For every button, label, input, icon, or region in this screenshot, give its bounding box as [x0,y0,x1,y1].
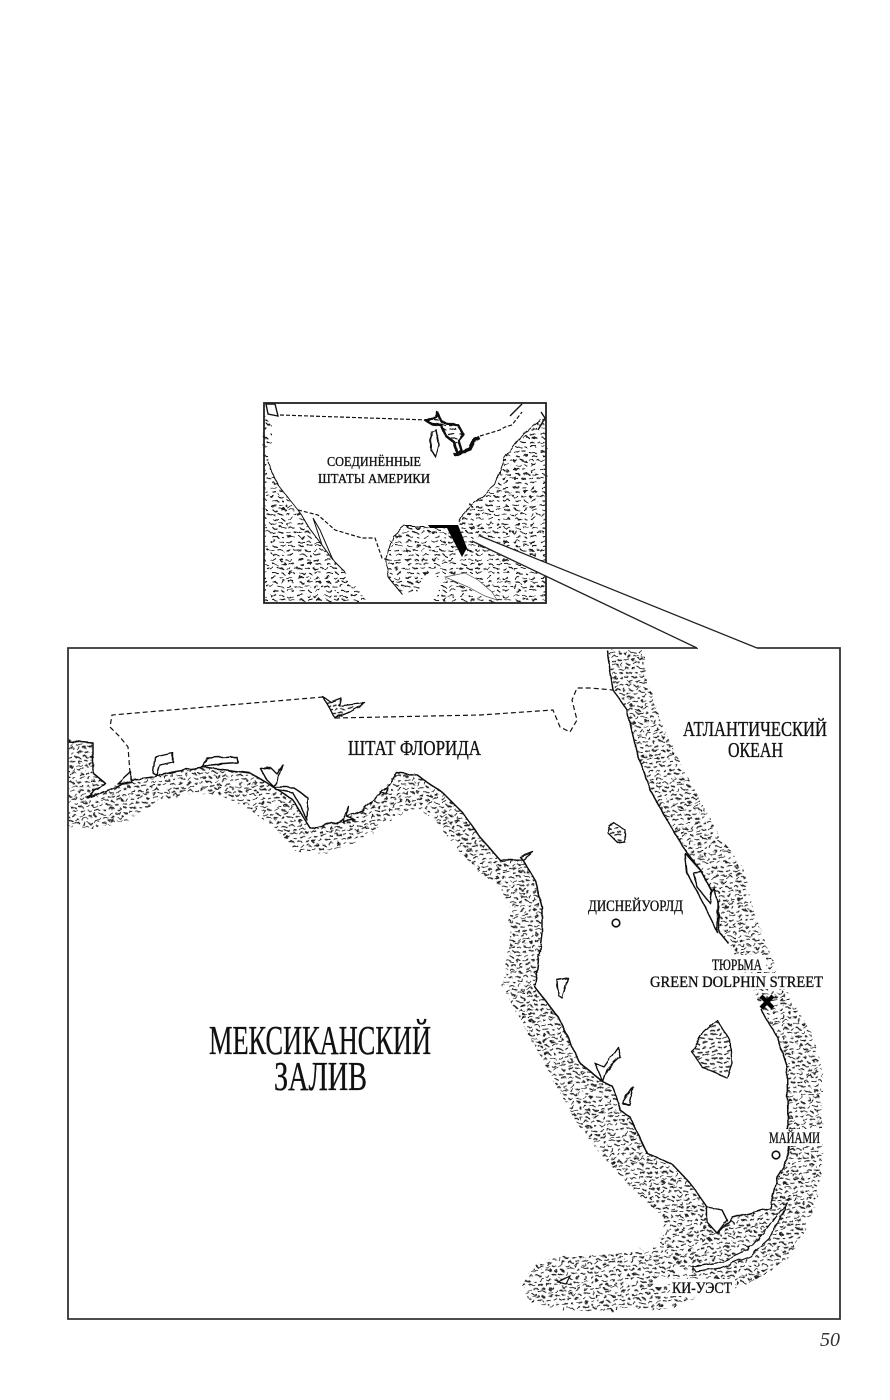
small key outline [558,1276,570,1284]
northern reservoir [323,697,365,718]
Gulf coast stipple [68,650,822,1312]
inset map: United States [264,403,546,603]
main frame with gap for callout [68,648,840,1319]
inset label: USA: ШТАТЫ АМЕРИКИ [318,472,430,487]
lake near Orlando [607,822,625,843]
inset ocean: Pacific and Baja [264,415,368,603]
icon: prison cross [761,996,773,1008]
inset coast lines [268,420,541,594]
inset label: USA [318,453,430,487]
inset Great Lakes [425,412,480,457]
inset corners [266,404,545,430]
inset Cuba [445,573,497,600]
Key West islands [623,1267,688,1290]
Key West marker: КИ-УЭСТ [672,1280,732,1297]
label: Atlantic Ocean [683,717,827,762]
inset frame [264,403,546,603]
coastline ink [68,650,788,1233]
Disney World marker: ДИСНЕЙУОРЛД [588,896,683,915]
lake Okeechobee [692,1020,732,1078]
state border dashed [110,688,613,773]
prison marker: GREEN DOLPHIN STREET [650,974,823,991]
Miami marker [767,1128,822,1159]
inset Baja gulf [313,518,333,560]
label: Gulf of Mexico: ЗАЛИВ [274,1053,367,1099]
label: Gulf of Mexico [209,1017,431,1099]
rivers and bays [118,753,727,1233]
prison marker [648,955,825,1008]
inland lakes [323,697,732,1078]
Miami marker: МАЙАМИ [769,1128,820,1147]
label: state of Florida: ШТАТ ФЛОРИДА [348,736,482,760]
label: Atlantic Ocean: АТЛАНТИЧЕСКИЙ [683,717,827,741]
inset ocean: Gulf and Atlantic [386,418,546,603]
label: Atlantic Ocean: ОКЕАН [728,738,783,762]
prison marker: ТЮРЬМА [712,957,762,974]
callout zoom lines [472,536,757,648]
Florida Keys channel [693,1202,787,1272]
main map: Florida [68,536,840,1319]
Florida highlighted black [428,525,467,557]
page number: 50 [820,1329,840,1351]
inset borders dashed [280,412,522,560]
Disney World marker [588,896,683,927]
inset label: USA: СОЕДИНЁННЫЕ [327,453,421,470]
label: Gulf of Mexico: МЕКСИКАНСКИЙ [209,1017,431,1063]
